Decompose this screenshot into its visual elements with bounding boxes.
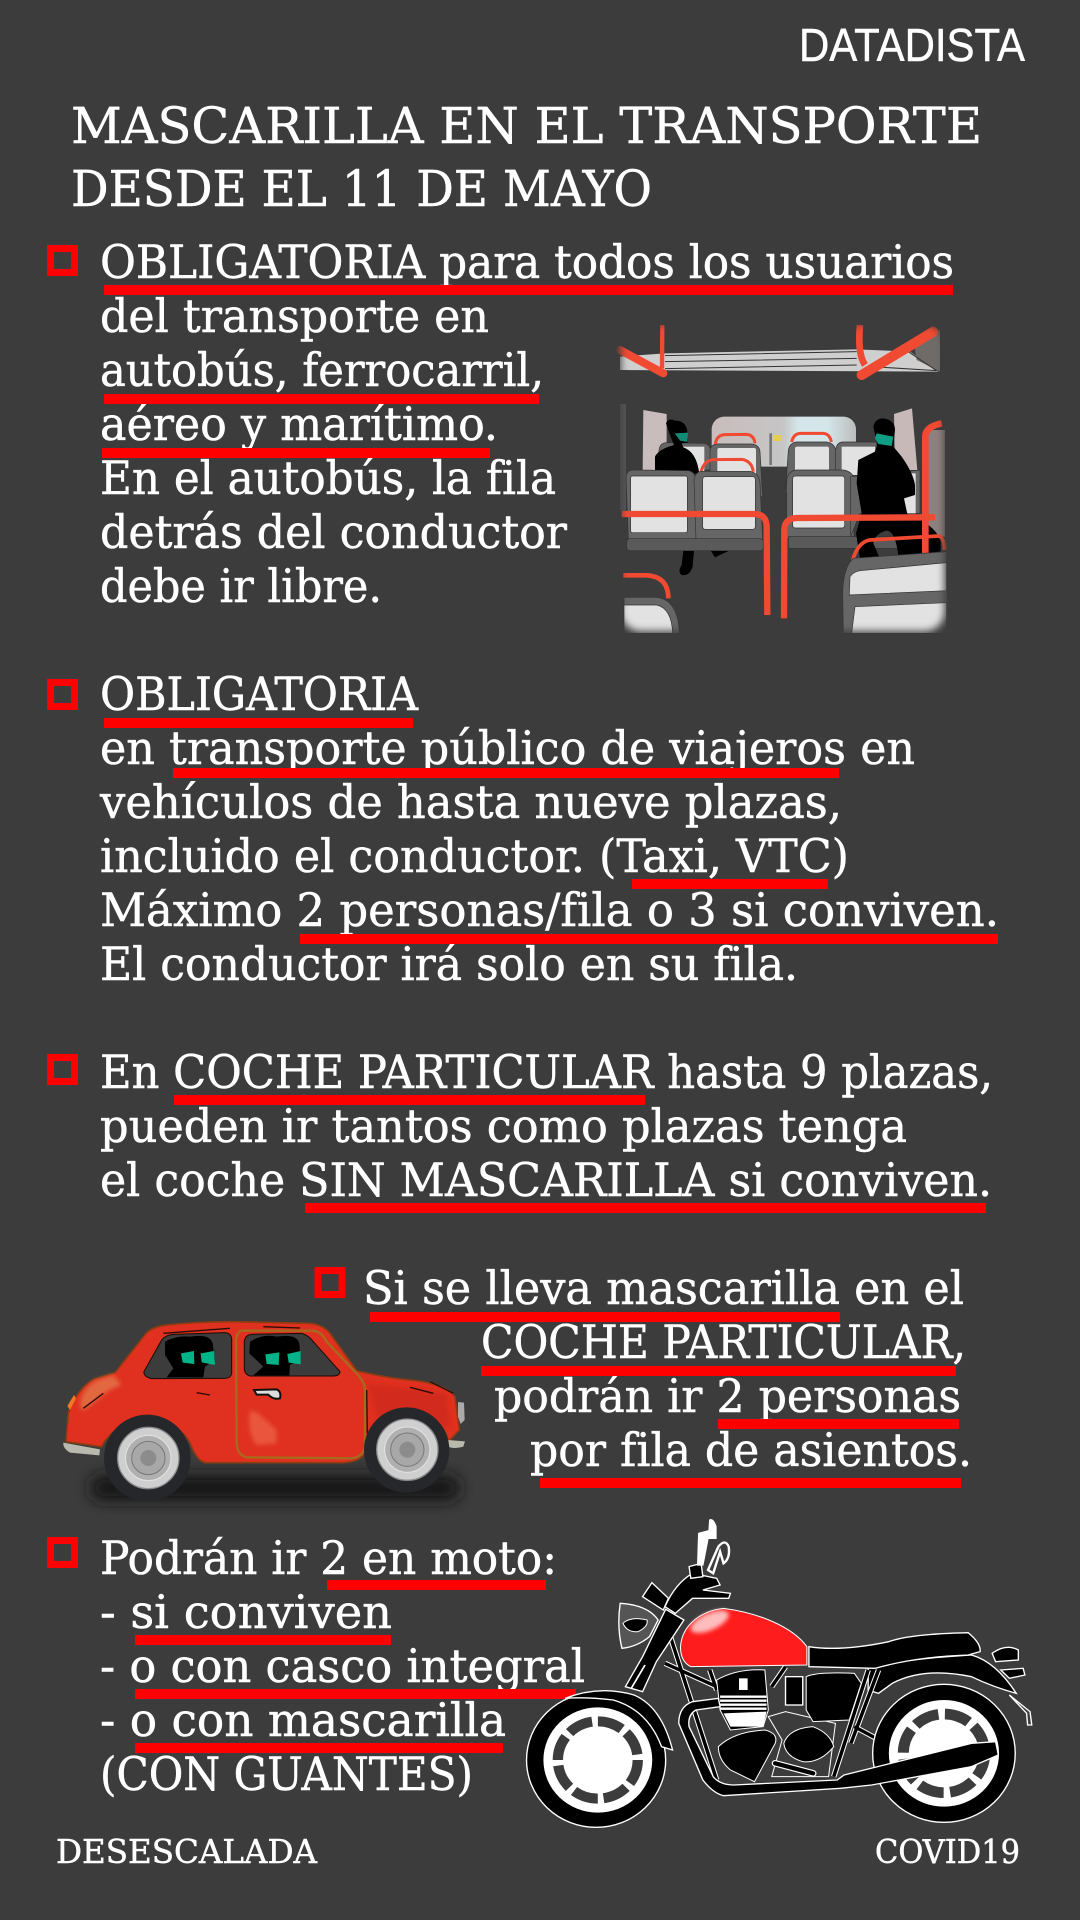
title: MASCARILLA EN EL TRANSPORTE	[71, 97, 982, 155]
text block: Si se lleva mascarilla en el	[363, 1261, 964, 1315]
text block: El conductor irá solo en su fila.	[100, 937, 798, 991]
text block: aéreo y marítimo.	[100, 397, 498, 451]
front wheel	[364, 1407, 449, 1493]
dark contour strokes	[83, 1327, 453, 1433]
handlebars and mirror	[643, 1520, 730, 1613]
footer left label: DESESCALADA	[56, 1832, 318, 1871]
passenger right	[856, 418, 941, 558]
section: mandatory in public passenger vehicles	[50, 667, 999, 991]
front seats	[626, 470, 920, 551]
underlines	[370, 1312, 961, 1488]
text block: OBLIGATORIA	[100, 667, 419, 721]
windows	[643, 408, 945, 537]
illustration: motorbike	[527, 1520, 1032, 1827]
door	[236, 1331, 365, 1458]
headlight	[619, 1603, 658, 1648]
illustration: bus interior	[620, 325, 948, 633]
bullet	[50, 1058, 74, 1082]
text block	[100, 235, 954, 613]
text block: autobús, ferrocarril,	[100, 343, 544, 397]
illustration: red car	[63, 1322, 465, 1501]
text block: Máximo 2 personas/fila o 3 si conviven.	[100, 883, 999, 937]
rear wheel	[873, 1684, 1015, 1822]
mask	[875, 433, 893, 446]
front fork	[565, 1609, 684, 1750]
front wheel	[527, 1693, 666, 1827]
section: private car with mask	[318, 1261, 972, 1488]
rear wheel	[104, 1415, 191, 1501]
text block	[99, 667, 999, 991]
text block: por fila de asientos.	[530, 1423, 972, 1477]
text block: del transporte en	[100, 289, 489, 343]
text block: - si conviven	[100, 1585, 392, 1639]
rear seats	[659, 442, 877, 497]
text block: En COCHE PARTICULAR hasta 9 plazas,	[100, 1045, 993, 1099]
underlines	[135, 1580, 576, 1753]
exhaust pipe	[679, 1698, 998, 1796]
body shading	[80, 1375, 122, 1411]
underlines	[104, 718, 998, 944]
text block: COCHE PARTICULAR,	[481, 1315, 966, 1369]
ceiling rails	[620, 325, 940, 375]
frame	[665, 1620, 885, 1780]
fork tube divider	[631, 1665, 645, 1688]
red horizontal grab bars	[622, 423, 945, 618]
side post	[620, 404, 626, 511]
masked passengers	[165, 1336, 301, 1377]
bumpers and headlight	[63, 1402, 465, 1455]
title	[71, 97, 982, 218]
small red handles	[701, 433, 831, 473]
title: DESDE EL 11 DE MAYO	[71, 160, 652, 218]
text block: el coche SIN MASCARILLA si conviven.	[100, 1153, 992, 1207]
windows	[144, 1333, 340, 1379]
shadow	[90, 1475, 460, 1501]
text block: vehículos de hasta nueve plazas,	[99, 775, 842, 829]
bullet	[50, 682, 74, 706]
text block: podrán ir 2 personas	[494, 1369, 961, 1423]
text block	[100, 1045, 993, 1207]
text block: En el autobús, la fila	[100, 451, 556, 505]
passenger left	[655, 419, 731, 575]
section: motorbike	[50, 1531, 585, 1801]
text block: debe ir libre.	[100, 559, 382, 613]
mask	[675, 433, 688, 442]
text block: pueden ir tantos como plazas tenga	[100, 1099, 907, 1153]
text block: Podrán ir 2 en moto:	[100, 1531, 557, 1585]
text block: detrás del conductor	[100, 505, 567, 559]
section: private car without mask	[50, 1045, 993, 1213]
brand label: DATADISTA	[799, 19, 1025, 71]
bullet	[50, 1540, 74, 1564]
underlines	[174, 1095, 986, 1213]
text block	[363, 1261, 972, 1477]
fuel tank	[680, 1606, 807, 1667]
body	[66, 1322, 459, 1463]
text block: OBLIGATORIA para todos los usuarios	[100, 235, 954, 289]
underlines	[102, 285, 953, 458]
text block: - o con mascarilla	[100, 1693, 506, 1747]
rear fender and seat	[809, 1633, 1032, 1725]
engine	[717, 1670, 861, 1782]
text block: incluido el conductor. (Taxi, VTC)	[100, 829, 849, 883]
door handle	[254, 1389, 280, 1399]
text block: (CON GUANTES)	[100, 1747, 473, 1801]
text block: - o con casco integral	[100, 1639, 585, 1693]
footer right label: COVID19	[875, 1832, 1020, 1871]
bullet	[50, 248, 74, 272]
text block: en transporte público de viajeros en	[100, 721, 915, 775]
text block	[100, 1531, 585, 1801]
tail light	[67, 1395, 76, 1410]
bullet	[318, 1270, 342, 1294]
section: mandatory on all transport	[50, 235, 954, 613]
foreground seats	[624, 552, 948, 633]
